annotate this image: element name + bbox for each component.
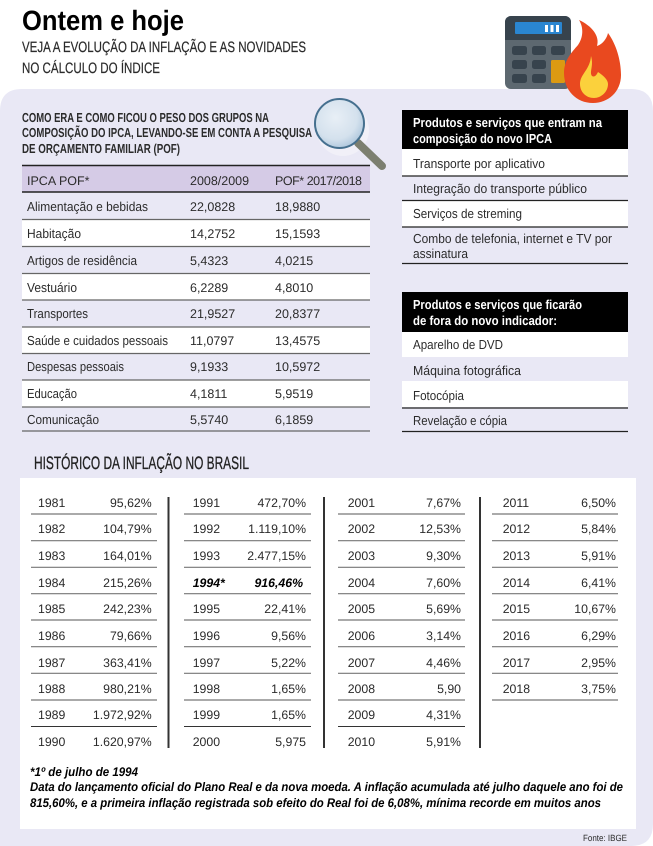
column: 2001-2010: 2004 (348, 576, 375, 590)
column: 1991-2000: 1999 (193, 708, 220, 722)
column: 2001-2010: 9,30% (426, 549, 461, 563)
heading: inflation history: HISTÓRICO DA INFLAÇÃO NO BRASIL (34, 453, 249, 473)
subtitle: NO CÁLCULO DO ÍNDICE (22, 59, 160, 77)
column: 2001-2010: 5,69% (426, 602, 461, 616)
column: 1991-2000: 5,22% (271, 656, 306, 670)
column: 2001-2010 (348, 496, 461, 749)
header: products leaving: de fora do novo indicador: (413, 313, 557, 328)
column: 1991-2000: 1998 (193, 682, 220, 696)
panel: products leaving: Revelação e cópia (413, 413, 508, 428)
panel: products entering: Transporte por aplicativo (413, 156, 545, 171)
text block: table heading: COMO ERA E COMO FICOU O PESO DOS GRUPOS NA (22, 110, 269, 125)
table rows: Habitação (27, 226, 81, 241)
column: 2011-2018: 2016 (503, 629, 530, 643)
panel: inflation table (20, 478, 636, 829)
footnote: 815,60%, e a primeira inflação registrada sob efeito do Real foi de 6,08%, mínima recorde em muitos anos (30, 796, 601, 810)
panel: products entering: Combo de telefonia, internet e TV por (413, 231, 613, 246)
alternating white rows (22, 220, 370, 407)
table rows: 11,0797 (190, 334, 234, 348)
panel: products leaving: Máquina fotográfica (413, 363, 522, 378)
panel: products entering: assinatura (413, 246, 469, 261)
column: 2011-2018: 2018 (503, 682, 530, 696)
table rows: 9,1933 (190, 360, 228, 374)
column: 1981-1990: 1990 (38, 735, 66, 749)
table rows: 4,1811 (190, 387, 227, 401)
panel: products leaving: Fotocópia (413, 388, 465, 403)
table rows: 5,5740 (190, 413, 228, 427)
column: 1991-2000: 2.477,15% (247, 549, 306, 563)
column: 1981-1990: 215,26% (103, 576, 152, 590)
column: 2001-2010: 3,14% (426, 629, 461, 643)
table rows: 6,2289 (190, 281, 228, 295)
table header: 2008/2009 (190, 174, 249, 188)
column: 1981-1990: 1987 (38, 656, 66, 670)
column: 2001-2010: 5,91% (426, 735, 461, 749)
column: 2011-2018: 6,41% (581, 576, 616, 590)
column: 2001-2010: 2002 (348, 522, 375, 536)
footnote: *1º de julho de 1994 (30, 765, 138, 779)
column: 2011-2018: 2012 (503, 522, 530, 536)
table rows: 10,5972 (275, 360, 320, 374)
table rows: Despesas pessoais (27, 359, 124, 374)
column: 2001-2010: 7,67% (426, 496, 461, 510)
column: 2011-2018: 2013 (503, 549, 530, 563)
icon: calculator on fire (505, 16, 621, 103)
panel: products entering: Serviços de streming (413, 206, 522, 221)
column: 1991-2000 (193, 496, 306, 749)
text block: table heading: DE ORÇAMENTO FAMILIAR (POF) (22, 141, 180, 156)
text block: table heading: COMPOSIÇÃO DO IPCA, LEVANDO-SE EM CONTA A PESQUISA (22, 125, 312, 140)
table rows: 14,2752 (190, 227, 235, 241)
column: 1991-2000: 1996 (193, 629, 220, 643)
footnote (30, 765, 623, 810)
table rows: 5,9519 (275, 387, 313, 401)
column: 1991-2000: 916,46% (254, 576, 303, 590)
column: 1981-1990: 980,21% (103, 682, 152, 696)
column: 2011-2018: 2017 (503, 656, 530, 670)
table rows: Educação (27, 386, 77, 401)
title: Ontem e hoje (22, 5, 184, 36)
column: 2001-2010: 2005 (348, 602, 375, 616)
column: 1981-1990 (38, 496, 152, 749)
column: 2011-2018: 2,95% (581, 656, 616, 670)
column: 1981-1990: 1988 (38, 682, 66, 696)
column: 1991-2000: 9,56% (271, 629, 306, 643)
column: 1981-1990: 1989 (38, 708, 66, 722)
icon: magnifying glass (315, 99, 382, 166)
column: 1981-1990: 1981 (38, 496, 66, 510)
column: 2001-2010: 2007 (348, 656, 375, 670)
column: 2001-2010: 2010 (348, 735, 375, 749)
column: 1981-1990: 104,79% (103, 522, 152, 536)
table rows: 15,1593 (275, 227, 320, 241)
column: 1991-2000: 1991 (193, 496, 220, 510)
column: 1981-1990: 242,23% (103, 602, 152, 616)
subtitle (22, 38, 306, 77)
table header: POF* 2017/2018 (275, 174, 362, 188)
column: 1991-2000: 1,65% (271, 682, 306, 696)
table rows: Transportes (27, 306, 88, 321)
column: 1991-2000: 2000 (193, 735, 220, 749)
table rows: Comunicação (27, 412, 99, 427)
column: 2001-2010: 5,90 (437, 682, 461, 696)
table header: IPCA POF* (27, 174, 90, 188)
column: 1981-1990: 1984 (38, 576, 66, 590)
column: 1991-2000: 1993 (193, 549, 220, 563)
panel: products entering: Integração do transporte público (413, 181, 587, 196)
table rows: 13,4575 (275, 334, 320, 348)
table rows: 20,8377 (275, 307, 320, 321)
table header (22, 166, 370, 192)
column: 1991-2000: 1997 (193, 656, 220, 670)
column: 1981-1990: 1986 (38, 629, 66, 643)
text block: table heading (22, 110, 312, 156)
column: 2001-2010: 12,53% (419, 522, 461, 536)
column: 2001-2010: 2001 (348, 496, 375, 510)
table rows: 4,0215 (275, 254, 313, 268)
column: 2001-2010: 4,46% (426, 656, 461, 670)
header: products entering: composição do novo IPCA (413, 131, 553, 146)
column: 1981-1990: 95,62% (110, 496, 152, 510)
column: 2011-2018: 5,91% (581, 549, 616, 563)
header: products leaving: Produtos e serviços que ficarão (413, 297, 582, 312)
column: 2011-2018: 2014 (503, 576, 530, 590)
table rows: 5,4323 (190, 254, 228, 268)
column: 1991-2000: 1,65% (271, 708, 306, 722)
table rows: 6,1859 (275, 413, 313, 427)
panel: products leaving (402, 292, 628, 432)
chart: inflation table columns (31, 496, 618, 749)
table rows: Artigos de residência (27, 253, 138, 268)
column: 1991-2000: 5,975 (275, 735, 306, 749)
column: 2001-2010: 4,31% (426, 708, 461, 722)
column: 1991-2000: 1.119,10% (248, 522, 306, 536)
panel: products entering (402, 110, 628, 264)
header: products entering (402, 110, 628, 149)
column: 1981-1990: 164,01% (103, 549, 152, 563)
column: 1991-2000: 1994* (193, 576, 226, 590)
column: 2011-2018: 2011 (503, 496, 529, 510)
column: 1991-2000: 1992 (193, 522, 220, 536)
column: 1981-1990: 79,66% (110, 629, 152, 643)
column: 2001-2010: 7,60% (426, 576, 461, 590)
column: 1981-1990: 1983 (38, 549, 66, 563)
source: Fonte: IBGE (583, 833, 627, 843)
table rows: 18,9880 (275, 200, 320, 214)
table rows: Vestuário (27, 280, 77, 295)
column: 1981-1990: 1985 (38, 602, 66, 616)
column: 2001-2010: 2003 (348, 549, 375, 563)
table rows (27, 199, 320, 427)
table rows: Saúde e cuidados pessoais (27, 333, 168, 348)
panel: products leaving: Aparelho de DVD (413, 337, 503, 352)
column: 1991-2000: 22,41% (264, 602, 306, 616)
column: 2011-2018: 6,29% (581, 629, 616, 643)
column: 1981-1990: 363,41% (103, 656, 152, 670)
column: 2001-2010: 2006 (348, 629, 375, 643)
column: 1991-2000: 472,70% (257, 496, 306, 510)
column: 1991-2000: 1995 (193, 602, 220, 616)
column: 2011-2018: 3,75% (581, 682, 616, 696)
header: products entering: Produtos e serviços que entram na (413, 115, 603, 130)
table rows: 21,9527 (190, 307, 235, 321)
table rows: 4,8010 (275, 281, 313, 295)
column: 2001-2010: 2008 (348, 682, 375, 696)
column: 2011-2018: 2015 (503, 602, 530, 616)
column: 2011-2018 (503, 496, 616, 696)
header: products leaving (402, 292, 628, 332)
column: 2011-2018: 5,84% (581, 522, 616, 536)
column: 1981-1990: 1.620,97% (93, 735, 152, 749)
table rows: Alimentação e bebidas (27, 199, 148, 214)
column: 2011-2018: 10,67% (574, 602, 616, 616)
subtitle: VEJA A EVOLUÇÃO DA INFLAÇÃO E AS NOVIDADES (22, 38, 306, 56)
column: 2011-2018: 6,50% (581, 496, 616, 510)
column: 1981-1990: 1.972,92% (93, 708, 152, 722)
table rows: 22,0828 (190, 200, 235, 214)
column: 1981-1990: 1982 (38, 522, 66, 536)
column: 2001-2010: 2009 (348, 708, 375, 722)
table: IPCA weights (22, 166, 370, 431)
